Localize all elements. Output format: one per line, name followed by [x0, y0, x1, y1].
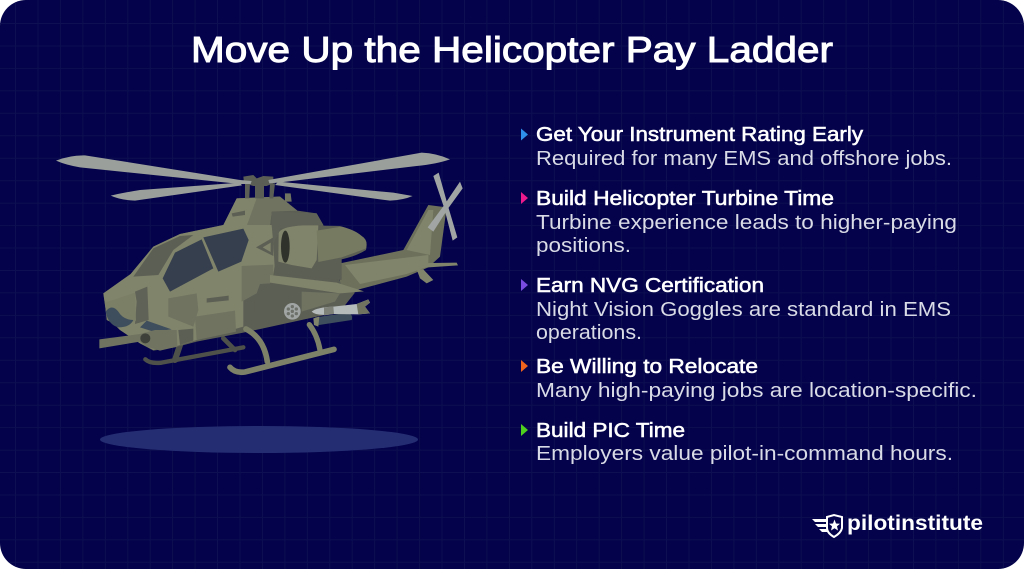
icon: winged shield [812, 515, 842, 537]
arrow: purple [521, 279, 528, 291]
body text line 2: positions. [536, 235, 631, 257]
cockpit canopy frame [103, 225, 275, 350]
list item: turbine time [521, 188, 957, 257]
stub wing [270, 275, 364, 293]
rear skid [145, 338, 243, 363]
body text line 2: operations. [536, 322, 642, 344]
chevron marking [256, 237, 273, 256]
main rotor blades [56, 155, 252, 184]
missile [312, 299, 370, 315]
engine cowling [273, 225, 367, 280]
fuselage main [103, 197, 355, 351]
list item: relocate [521, 356, 977, 402]
front skid [230, 325, 334, 372]
upper cowling [223, 197, 288, 225]
list item: PIC time [521, 420, 953, 465]
list item: instrument rating [521, 124, 952, 170]
title: Move Up the Helicopter Pay Ladder [191, 29, 833, 70]
heading: Build Helicopter Turbine Time [536, 188, 834, 210]
rocket pod [284, 303, 301, 320]
ground shadow ellipse [100, 426, 418, 453]
camo patches [242, 265, 273, 302]
body text: Required for many EMS and offshore jobs. [536, 148, 952, 170]
icon: helicopter illustration [56, 153, 463, 372]
arrow: green [521, 424, 528, 436]
arrow: blue [521, 128, 528, 140]
logo wordmark: pilotinstitute [847, 512, 983, 535]
lower pod [315, 313, 352, 325]
tail boom [340, 205, 447, 290]
rotor mast [245, 180, 275, 198]
chin turret and gun [99, 330, 177, 351]
arrow: pink [521, 192, 528, 204]
heading: Earn NVG Certification [536, 275, 764, 297]
heading: Build PIC Time [536, 420, 685, 442]
cockpit windows [163, 239, 213, 292]
tail stabilizer [407, 263, 458, 283]
body text: Night Vision Goggles are standard in EMS [536, 299, 951, 321]
rear canopy glass [133, 235, 193, 277]
body text: Employers value pilot-in-command hours. [536, 443, 953, 465]
logo: pilotinstitute [812, 512, 983, 537]
heading: Get Your Instrument Rating Early [536, 124, 863, 146]
arrow: orange [521, 360, 528, 372]
tail rotor [428, 173, 463, 241]
list item: NVG [521, 275, 951, 344]
heading: Be Willing to Relocate [536, 356, 758, 378]
nose and sensor [135, 287, 149, 324]
body text: Many high-paying jobs are location-specific. [536, 380, 977, 402]
body text: Turbine experience leads to higher-paying [536, 212, 957, 234]
